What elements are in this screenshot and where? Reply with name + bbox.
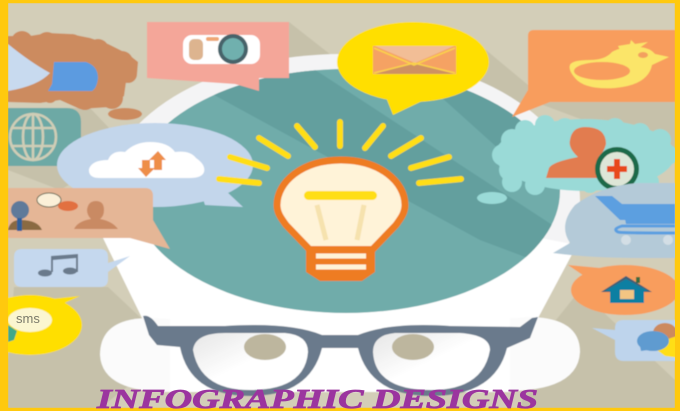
light bulb xyxy=(277,160,405,281)
icon: envelope xyxy=(373,46,456,74)
bubble: music xyxy=(14,249,130,287)
teal head interior xyxy=(132,69,560,313)
icon: cloud xyxy=(89,142,204,178)
head xyxy=(100,54,580,392)
sms label bubble xyxy=(8,308,52,332)
bulb base stripes xyxy=(316,256,366,267)
bulb highlight xyxy=(304,191,377,200)
thought puff xyxy=(477,192,507,204)
bubble: mail xyxy=(337,22,489,115)
glasses frame xyxy=(143,316,538,396)
glasses xyxy=(143,316,538,396)
icon: tablet xyxy=(48,62,98,91)
bubble: bird xyxy=(512,30,675,117)
left ear xyxy=(100,318,170,392)
icon: music notes xyxy=(38,254,78,276)
icon: sync arrows xyxy=(138,151,166,177)
icon: plus badge xyxy=(595,147,639,191)
icon: person silhouette xyxy=(74,201,118,229)
bubble: sms xyxy=(0,295,82,355)
light inner shape xyxy=(8,44,50,91)
bubble: home xyxy=(568,265,679,315)
sms text: sms xyxy=(16,311,40,326)
icon: person xyxy=(546,127,608,178)
head lower white xyxy=(102,237,572,320)
bulb base xyxy=(306,246,375,281)
icon: businessman xyxy=(8,201,42,231)
thought puff xyxy=(108,108,142,120)
bubble: shopping cart xyxy=(553,183,680,258)
bubble: cloud sync xyxy=(57,123,253,207)
left lens xyxy=(193,333,308,390)
bubble: camera xyxy=(147,22,289,91)
right pupil xyxy=(392,334,434,360)
icon: chat bubbles xyxy=(637,323,680,358)
icon: globe xyxy=(10,114,56,160)
teal diagonal shadows xyxy=(214,70,552,257)
tile: globe xyxy=(8,108,81,166)
bulb glass xyxy=(277,160,405,250)
icon: orange speech xyxy=(58,201,78,211)
icon: bird xyxy=(570,40,669,88)
icon: house xyxy=(601,276,652,303)
right lens xyxy=(373,333,490,390)
light bulb rays xyxy=(219,122,461,183)
icon: speech dots xyxy=(37,193,61,207)
icon: cart xyxy=(595,196,675,245)
icon: camera xyxy=(183,34,260,64)
icon: green tag xyxy=(8,325,17,342)
bubble: tablet thought cloud xyxy=(8,31,142,120)
right ear xyxy=(510,317,580,392)
face lower white xyxy=(170,318,510,392)
bubble: health thought cloud xyxy=(477,115,678,204)
bubble: people talking xyxy=(8,188,170,249)
left pupil xyxy=(244,334,286,360)
head white shape xyxy=(139,54,580,244)
bubble: chat xyxy=(592,320,680,361)
bulb filament xyxy=(317,205,364,240)
